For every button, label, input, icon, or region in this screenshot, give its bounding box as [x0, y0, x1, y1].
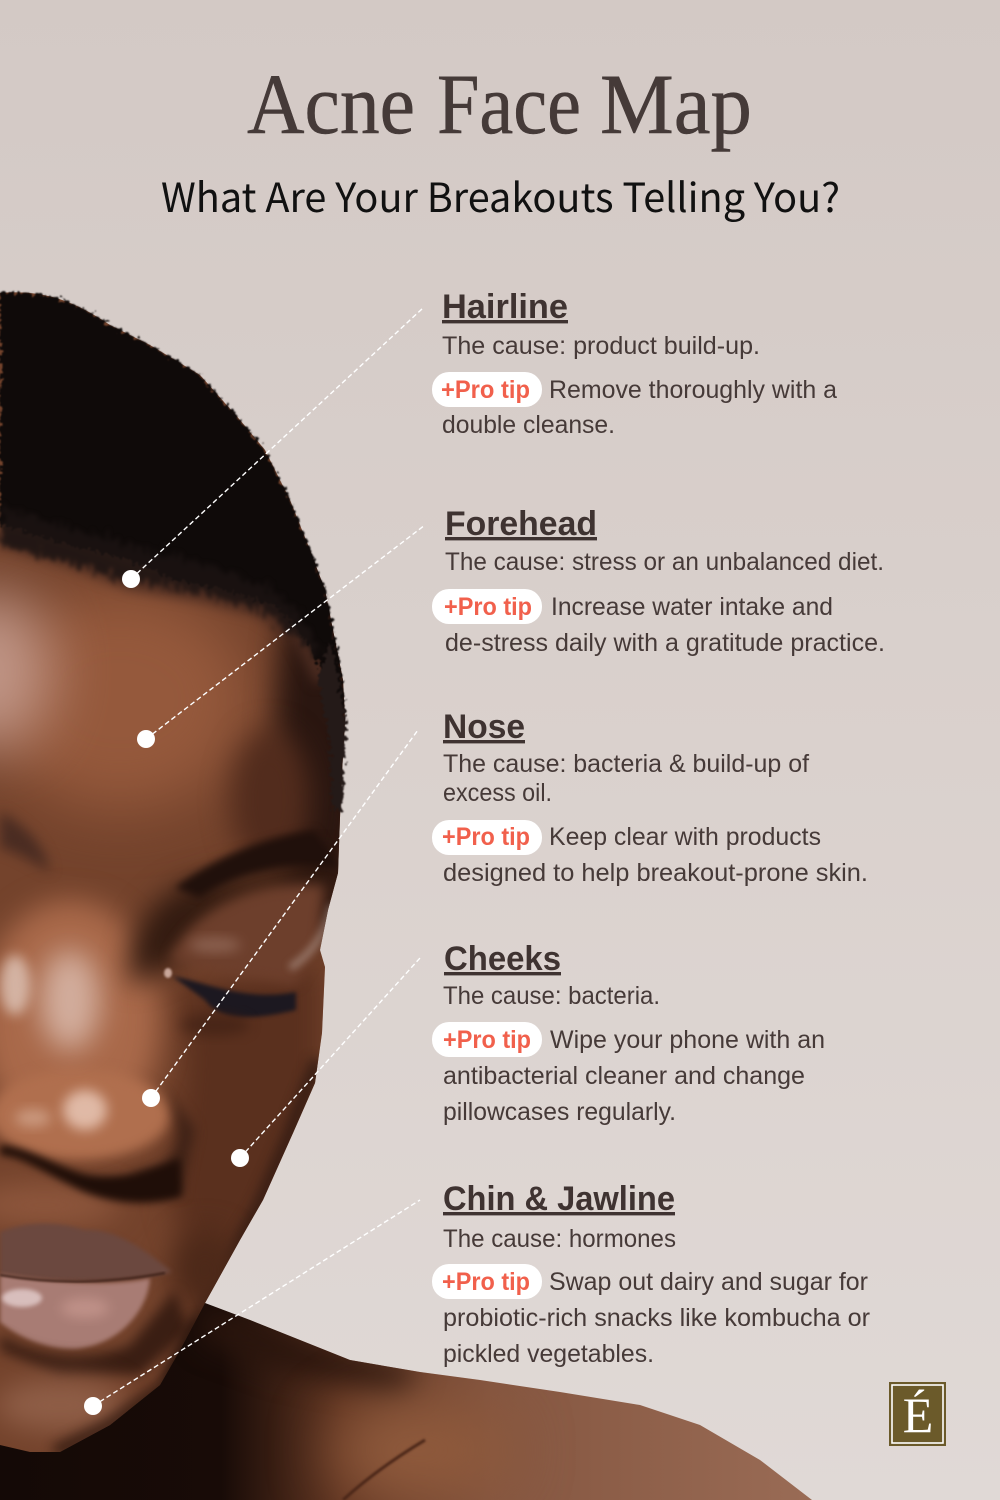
callout line: forehead — [137, 525, 425, 748]
section: hairline: double cleanse. — [442, 411, 615, 439]
inner eye highlight — [164, 968, 172, 978]
logo: É — [903, 1387, 933, 1443]
section: chin and jawline: +Pro tip — [442, 1268, 530, 1296]
upper lip — [0, 1224, 172, 1281]
section: forehead: +Pro tip — [444, 593, 532, 621]
lower lip — [0, 1274, 150, 1349]
section: chin and jawline: Chin & Jawline — [443, 1180, 675, 1218]
callout line: chin — [84, 1200, 420, 1415]
jaw edge shadow — [170, 1060, 318, 1385]
title: Face — [437, 56, 581, 152]
lips: skin surround — [170, 1230, 240, 1310]
section: nose: Nose — [443, 708, 525, 746]
left brow — [0, 812, 50, 872]
chin edge — [55, 1320, 200, 1452]
section: chin and jawline: pickled vegetables. — [443, 1340, 654, 1368]
section: hairline: Hairline — [442, 288, 568, 326]
neck and shoulder — [0, 1300, 820, 1500]
section: hairline: Remove thoroughly with a — [549, 376, 837, 404]
section: nose: The cause: bacteria & build-up of — [443, 750, 809, 778]
section: nose: excess oil. — [443, 779, 552, 807]
callout line: hairline — [122, 308, 423, 588]
nose side shadow — [135, 1095, 198, 1188]
section: nose — [432, 708, 868, 887]
title: Map — [600, 56, 752, 152]
section: hairline: +Pro tip — [441, 376, 530, 404]
section: cheeks: Cheeks — [444, 940, 561, 978]
eyelashes — [172, 976, 296, 1017]
section: cheeks: antibacterial cleaner and change — [443, 1062, 805, 1090]
section: chin and jawline: probiotic-rich snacks like kombucha or — [443, 1304, 870, 1332]
section: forehead: The cause: stress or an unbalanced diet. — [445, 548, 884, 576]
section: forehead: de-stress daily with a gratitude practice. — [445, 629, 885, 657]
hairline shadow — [0, 535, 325, 680]
face skin — [0, 292, 345, 1452]
temple highlight — [290, 905, 332, 968]
section: chin and jawline: The cause: hormones — [443, 1225, 676, 1253]
section: nose: designed to help breakout-prone skin. — [443, 859, 868, 887]
section: cheeks: Wipe your phone with an — [550, 1026, 825, 1054]
callout line: cheeks — [231, 958, 420, 1167]
section: nose: +Pro tip — [442, 823, 530, 851]
photo: woman's face — [0, 292, 820, 1500]
cheek — [170, 960, 320, 1300]
section: hairline: The cause: product build-up. — [442, 332, 760, 360]
sideburn hair — [318, 640, 346, 810]
nose highlights — [40, 950, 100, 1050]
mouth line — [0, 1273, 165, 1282]
hairline fringe — [0, 505, 325, 660]
eye socket shadow — [130, 860, 340, 985]
title: Acne — [247, 56, 415, 152]
right brow — [175, 830, 340, 898]
title — [247, 56, 752, 152]
nose — [0, 900, 160, 1140]
section: hairline — [432, 288, 837, 439]
section: cheeks — [432, 940, 825, 1126]
eyelid — [170, 884, 325, 985]
section: forehead: Increase water intake and — [551, 593, 833, 621]
under-eye shadow — [180, 1014, 250, 1036]
lip shadow — [0, 1290, 190, 1375]
nostril shadow — [0, 1145, 182, 1203]
skin under nose — [0, 1183, 120, 1227]
section: forehead — [432, 505, 885, 657]
section: cheeks: The cause: bacteria. — [443, 982, 660, 1010]
section: chin and jawline: Swap out dairy and sugar for — [549, 1268, 868, 1296]
logo — [889, 1382, 946, 1446]
section: cheeks: pillowcases regularly. — [443, 1098, 676, 1126]
section: cheeks: +Pro tip — [443, 1026, 531, 1054]
callout line: nose — [142, 730, 418, 1107]
section: chin and jawline — [432, 1180, 870, 1368]
section: nose: Keep clear with products — [549, 823, 821, 851]
section: forehead: Forehead — [445, 505, 597, 543]
subtitle: What Are Your Breakouts Telling You? — [161, 166, 840, 224]
skin shading — [0, 590, 250, 810]
chin — [0, 1379, 125, 1431]
hair — [0, 292, 345, 740]
